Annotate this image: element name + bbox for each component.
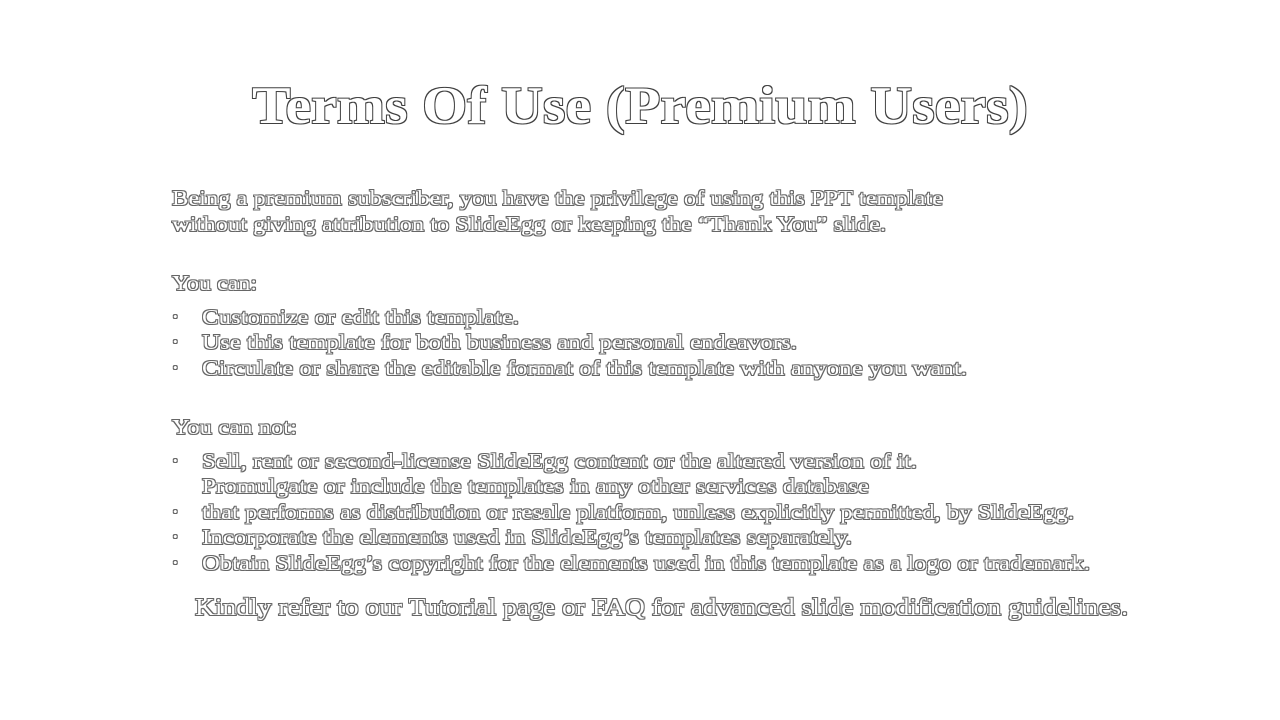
list: prohibited uses: Obtain SlideEgg’s copyright for the elements used in this template as a logo or trademark. bbox=[202, 551, 1090, 575]
list: prohibited uses: Incorporate the elements used in SlideEgg’s templates separately. bbox=[202, 525, 852, 549]
heading: you can: You can: bbox=[172, 271, 257, 295]
list: prohibited uses: • bbox=[173, 453, 178, 468]
list: prohibited uses: Promulgate or include the templates in any other services database bbox=[202, 474, 869, 498]
list: prohibited uses: that performs as distribution or resale platform, unless explicitly permitted, by SlideEgg. bbox=[202, 500, 1074, 524]
list: prohibited uses bbox=[173, 449, 1090, 575]
list: prohibited uses: • bbox=[173, 555, 178, 570]
text block: introduction bbox=[172, 186, 943, 236]
heading: you can not: You can not: bbox=[172, 415, 297, 439]
list: prohibited uses: • bbox=[173, 504, 178, 519]
list: prohibited uses: • bbox=[173, 529, 178, 544]
list: permitted uses: • bbox=[173, 360, 178, 375]
list: permitted uses: Customize or edit this template. bbox=[202, 305, 519, 329]
list: permitted uses bbox=[173, 305, 967, 380]
title: Terms Of Use (Premium Users) bbox=[252, 75, 1028, 135]
text block: introduction: Being a premium subscriber, you have the privilege of using this PPT template bbox=[172, 186, 943, 210]
text block: introduction: without giving attribution to SlideEgg or keeping the “Thank You” slide. bbox=[172, 212, 886, 236]
list: permitted uses: • bbox=[173, 309, 178, 324]
list: permitted uses: Use this template for both business and personal endeavors. bbox=[202, 330, 797, 354]
list: permitted uses: Circulate or share the editable format of this template with anyone you want. bbox=[202, 356, 967, 380]
list: prohibited uses: Sell, rent or second-license SlideEgg content or the altered version of it. bbox=[202, 449, 917, 473]
list: permitted uses: • bbox=[173, 334, 178, 349]
footer note: Kindly refer to our Tutorial page or FAQ for advanced slide modification guidelines. bbox=[195, 595, 1128, 621]
